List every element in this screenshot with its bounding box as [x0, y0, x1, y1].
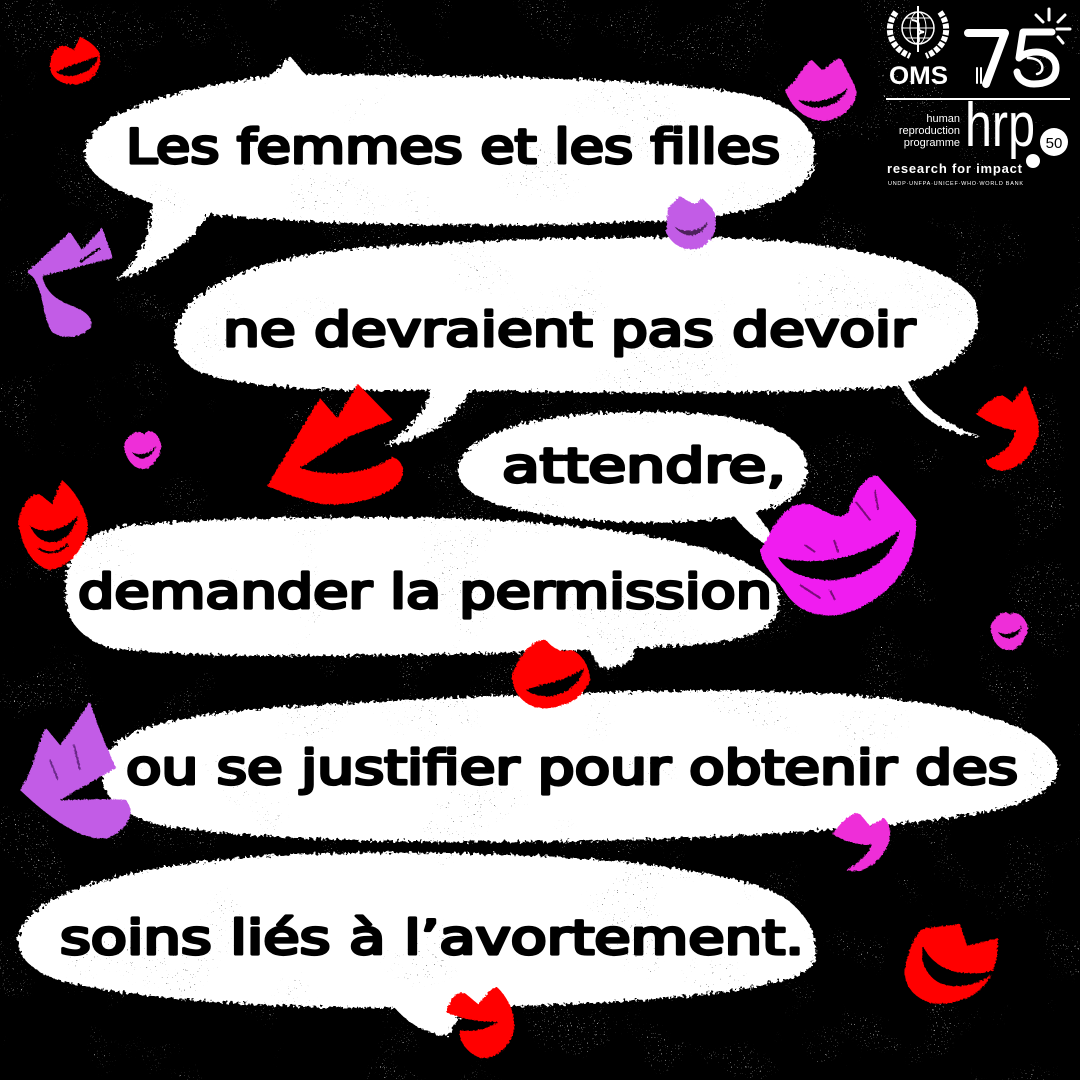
main text [60, 120, 1018, 966]
75 anniversary mark [968, 9, 1070, 84]
lips: magenta top right [785, 58, 856, 121]
speech bubble 4 [65, 518, 779, 668]
lips: red centre [512, 640, 590, 708]
lips: small magenta left [124, 431, 161, 469]
human reproduction programme: reproduction [899, 125, 960, 137]
speech bubble 3 [458, 412, 807, 552]
human reproduction programme [899, 113, 960, 149]
divider [886, 98, 1070, 100]
lips: large magenta centre right [760, 475, 916, 615]
lips: big red centre [267, 384, 403, 504]
line 3: attendre, [502, 439, 786, 494]
lips: violet big left [20, 702, 130, 839]
line 6: soins liés à l’avortement. [60, 911, 804, 966]
partners: UNDP·UNFPA·UNICEF·WHO·WORLD BANK [888, 181, 1023, 187]
lips: violet above bubble 2 [666, 196, 716, 249]
icon: WHO emblem [890, 6, 946, 56]
OMS label: OMS [889, 62, 948, 90]
lips: red right [976, 386, 1039, 471]
line 5: ou se justifier pour obtenir des [126, 741, 1018, 796]
lips: violet left [27, 228, 113, 337]
lips: red bottom right [905, 924, 998, 1004]
lips: magenta below bubble 5 [832, 813, 890, 871]
line 4: demander la permission [78, 565, 772, 620]
50 badge: 50 [1046, 135, 1062, 152]
lips: red left [18, 480, 88, 570]
lips: small magenta right [991, 612, 1028, 650]
logo block: OMS 75 and HRP [886, 6, 1070, 187]
dot [1026, 154, 1040, 168]
speech bubble 1 [85, 56, 815, 280]
speech bubble 2 [175, 237, 980, 446]
line 2: ne devraient pas devoir [223, 303, 916, 358]
research for impact: research for impact [887, 161, 1023, 176]
hrp wordmark: hrp [965, 91, 1035, 160]
speech bubble 5 [102, 691, 1058, 842]
human reproduction programme: human [926, 113, 960, 125]
human reproduction programme: programme [904, 137, 960, 149]
speech bubble 6 [18, 853, 816, 1036]
line 1: Les femmes et les filles [126, 120, 780, 175]
50 badge [1040, 128, 1068, 156]
lips: red bottom [446, 987, 514, 1058]
lips: red top left [50, 37, 100, 84]
